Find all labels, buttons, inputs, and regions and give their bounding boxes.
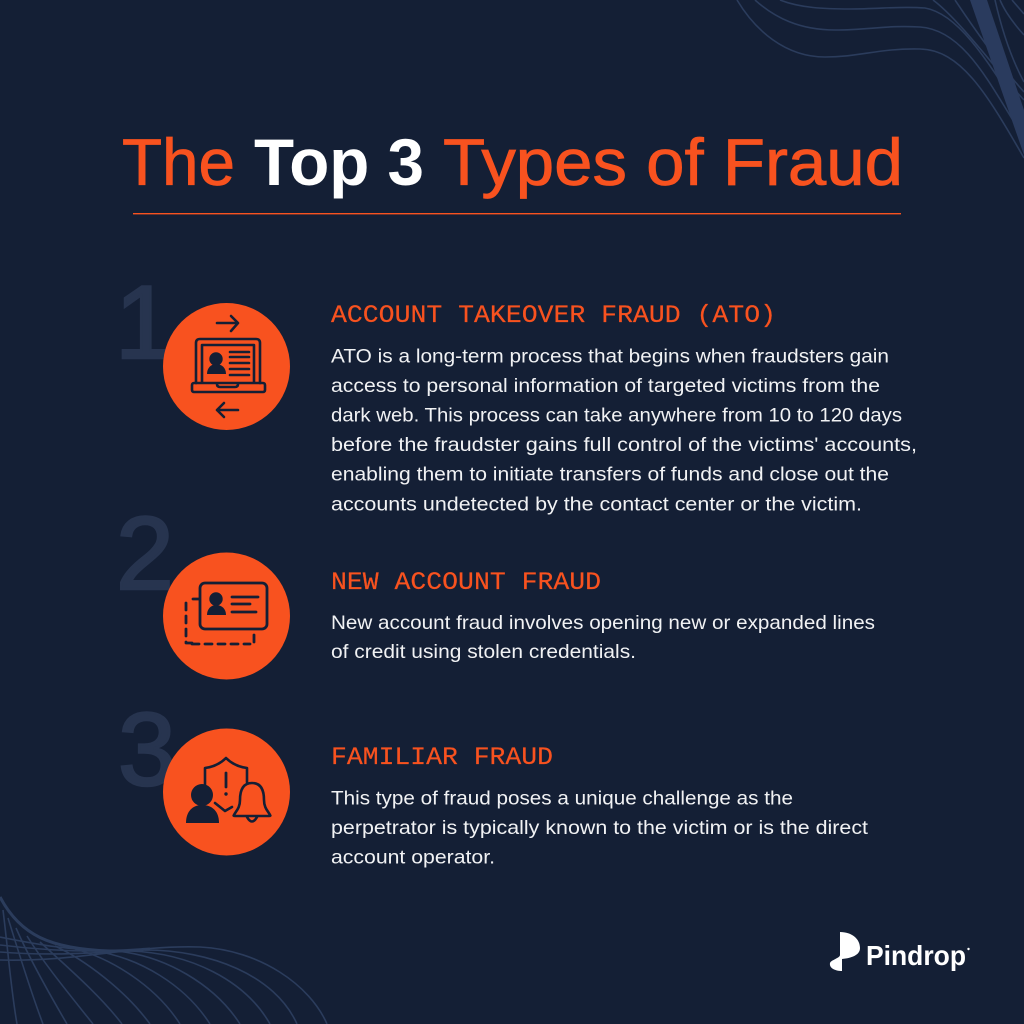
body text — [331, 788, 869, 868]
body text: ATO is a long-term process that begins when fraudsters gain — [331, 346, 889, 368]
number 3: 3 — [118, 692, 176, 808]
body text: accounts undetected by the contact center or the victim. — [331, 494, 862, 516]
title: Types of Fraud — [443, 125, 903, 199]
heading: FAMILIAR FRAUD — [331, 743, 553, 772]
heading: NEW ACCOUNT FRAUD — [331, 568, 601, 597]
item 2: new account fraud — [116, 496, 875, 680]
body text — [331, 612, 875, 663]
body text: account operator. — [331, 846, 495, 868]
heading: ACCOUNT TAKEOVER FRAUD (ATO) — [331, 301, 776, 330]
body text: before the fraudster gains full control of the victims' accounts, — [331, 434, 917, 456]
number 1: 1 — [115, 265, 173, 381]
title — [122, 125, 903, 199]
body text: This type of fraud poses a unique challenge as the — [331, 788, 793, 810]
body text — [331, 346, 917, 516]
body text: New account fraud involves opening new or expanded lines — [331, 612, 875, 634]
body text: enabling them to initiate transfers of funds and close out the — [331, 464, 889, 486]
body text: dark web. This process can take anywhere from 10 to 120 days — [331, 404, 902, 426]
body text: of credit using stolen credentials. — [331, 641, 636, 663]
icon: laptop with profile and arrows — [163, 303, 290, 430]
item 3: familiar fraud — [118, 692, 869, 868]
logo: Pindrop — [830, 932, 970, 971]
icon: person, shield and bell — [163, 728, 290, 856]
title: Top 3 — [254, 125, 424, 199]
number 2: 2 — [116, 496, 174, 612]
item 1: account takeover fraud — [115, 265, 917, 516]
decorative waves: top right — [737, 0, 1024, 158]
body text: access to personal information of targeted victims from the — [331, 375, 880, 397]
decorative waves: bottom left — [0, 897, 327, 1024]
title: The — [122, 125, 235, 199]
icon: id cards — [163, 552, 290, 680]
logo: Pindrop: Pindrop — [866, 940, 966, 971]
body text: perpetrator is typically known to the victim or is the direct — [331, 817, 869, 839]
